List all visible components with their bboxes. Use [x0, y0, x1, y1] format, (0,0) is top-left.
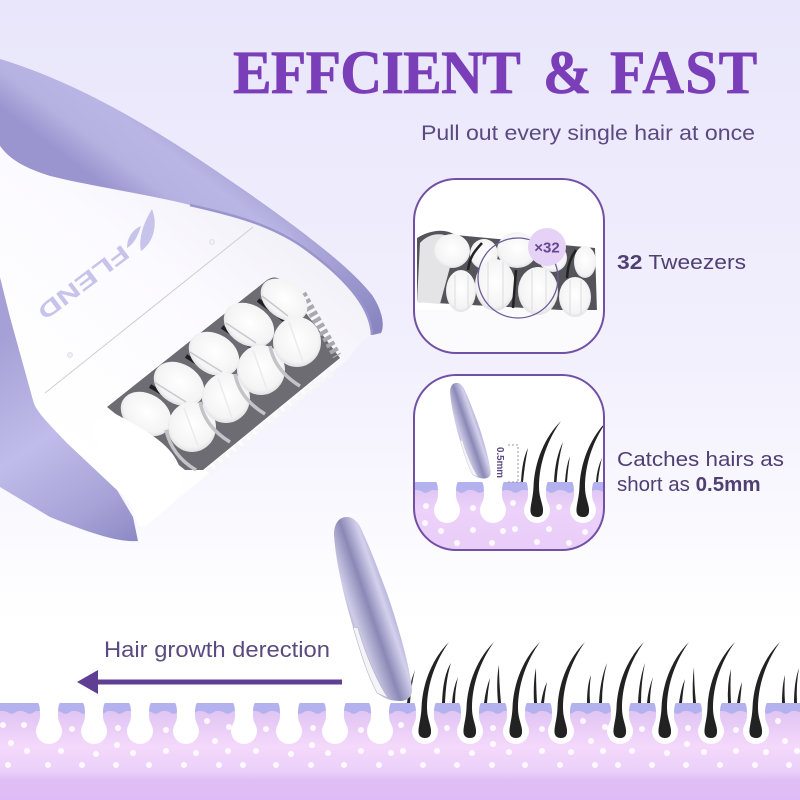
- hair growth direction label: Hair growth derection: [104, 637, 330, 662]
- gear band: [302, 294, 337, 356]
- small epilator: [334, 517, 412, 701]
- logo text: FLEND: [33, 240, 134, 325]
- serrated edge: [208, 370, 334, 472]
- logo leaf: [127, 209, 155, 251]
- badge x32: ×32: [534, 240, 560, 256]
- panel: 32 tweezers: [414, 179, 604, 354]
- skin cross-section: [0, 642, 800, 800]
- device white head: [0, 146, 372, 527]
- device upper purple shell: [0, 59, 383, 335]
- epilator device: [0, 59, 383, 541]
- silver fins: [166, 346, 300, 470]
- long hairs: [418, 642, 780, 738]
- skin dots: [0, 718, 800, 768]
- metal strips: [150, 300, 284, 405]
- skin layers: [0, 703, 800, 800]
- shell lower edge shadow: [190, 205, 372, 335]
- skin cross-section: [414, 421, 607, 552]
- arrow: hair growth direction: [77, 670, 342, 694]
- device lower purple shell: [0, 277, 138, 541]
- mini epilator: [450, 383, 491, 479]
- label: 32 tweezers: 32 Tweezers: [617, 251, 746, 274]
- 0.5mm measure: [494, 445, 522, 482]
- title: FAST: [610, 39, 757, 106]
- label: catches hairs: short as: [617, 473, 696, 496]
- label: catches hairs: 0.5mm: [696, 473, 761, 496]
- front row rollers: [168, 317, 321, 452]
- head front lobe: [90, 412, 182, 522]
- device screws: [68, 240, 214, 358]
- title: &: [543, 39, 591, 106]
- panel border: [414, 179, 604, 353]
- head opening: [107, 278, 340, 470]
- short hairs: [407, 663, 799, 703]
- panel: hair length: [414, 375, 607, 552]
- badge x32: [528, 228, 566, 266]
- tweezer head close-up: [417, 230, 597, 317]
- follicles: [36, 701, 769, 744]
- label: catches hairs: Catches hairs as: [617, 448, 784, 471]
- title: [233, 39, 757, 106]
- subtitle: Pull out every single hair at once: [421, 122, 755, 145]
- panel background: [414, 375, 604, 550]
- roller ribs: [184, 322, 303, 446]
- back row rollers: [113, 270, 316, 445]
- panel background: [414, 179, 604, 353]
- silver highlights: [154, 296, 288, 402]
- 0.5mm measure: 0.5mm: [494, 447, 505, 478]
- panel border: [414, 375, 604, 550]
- device seam line: [45, 227, 253, 393]
- title: EFFCIENT: [233, 39, 521, 106]
- magnifier circle: [478, 238, 558, 318]
